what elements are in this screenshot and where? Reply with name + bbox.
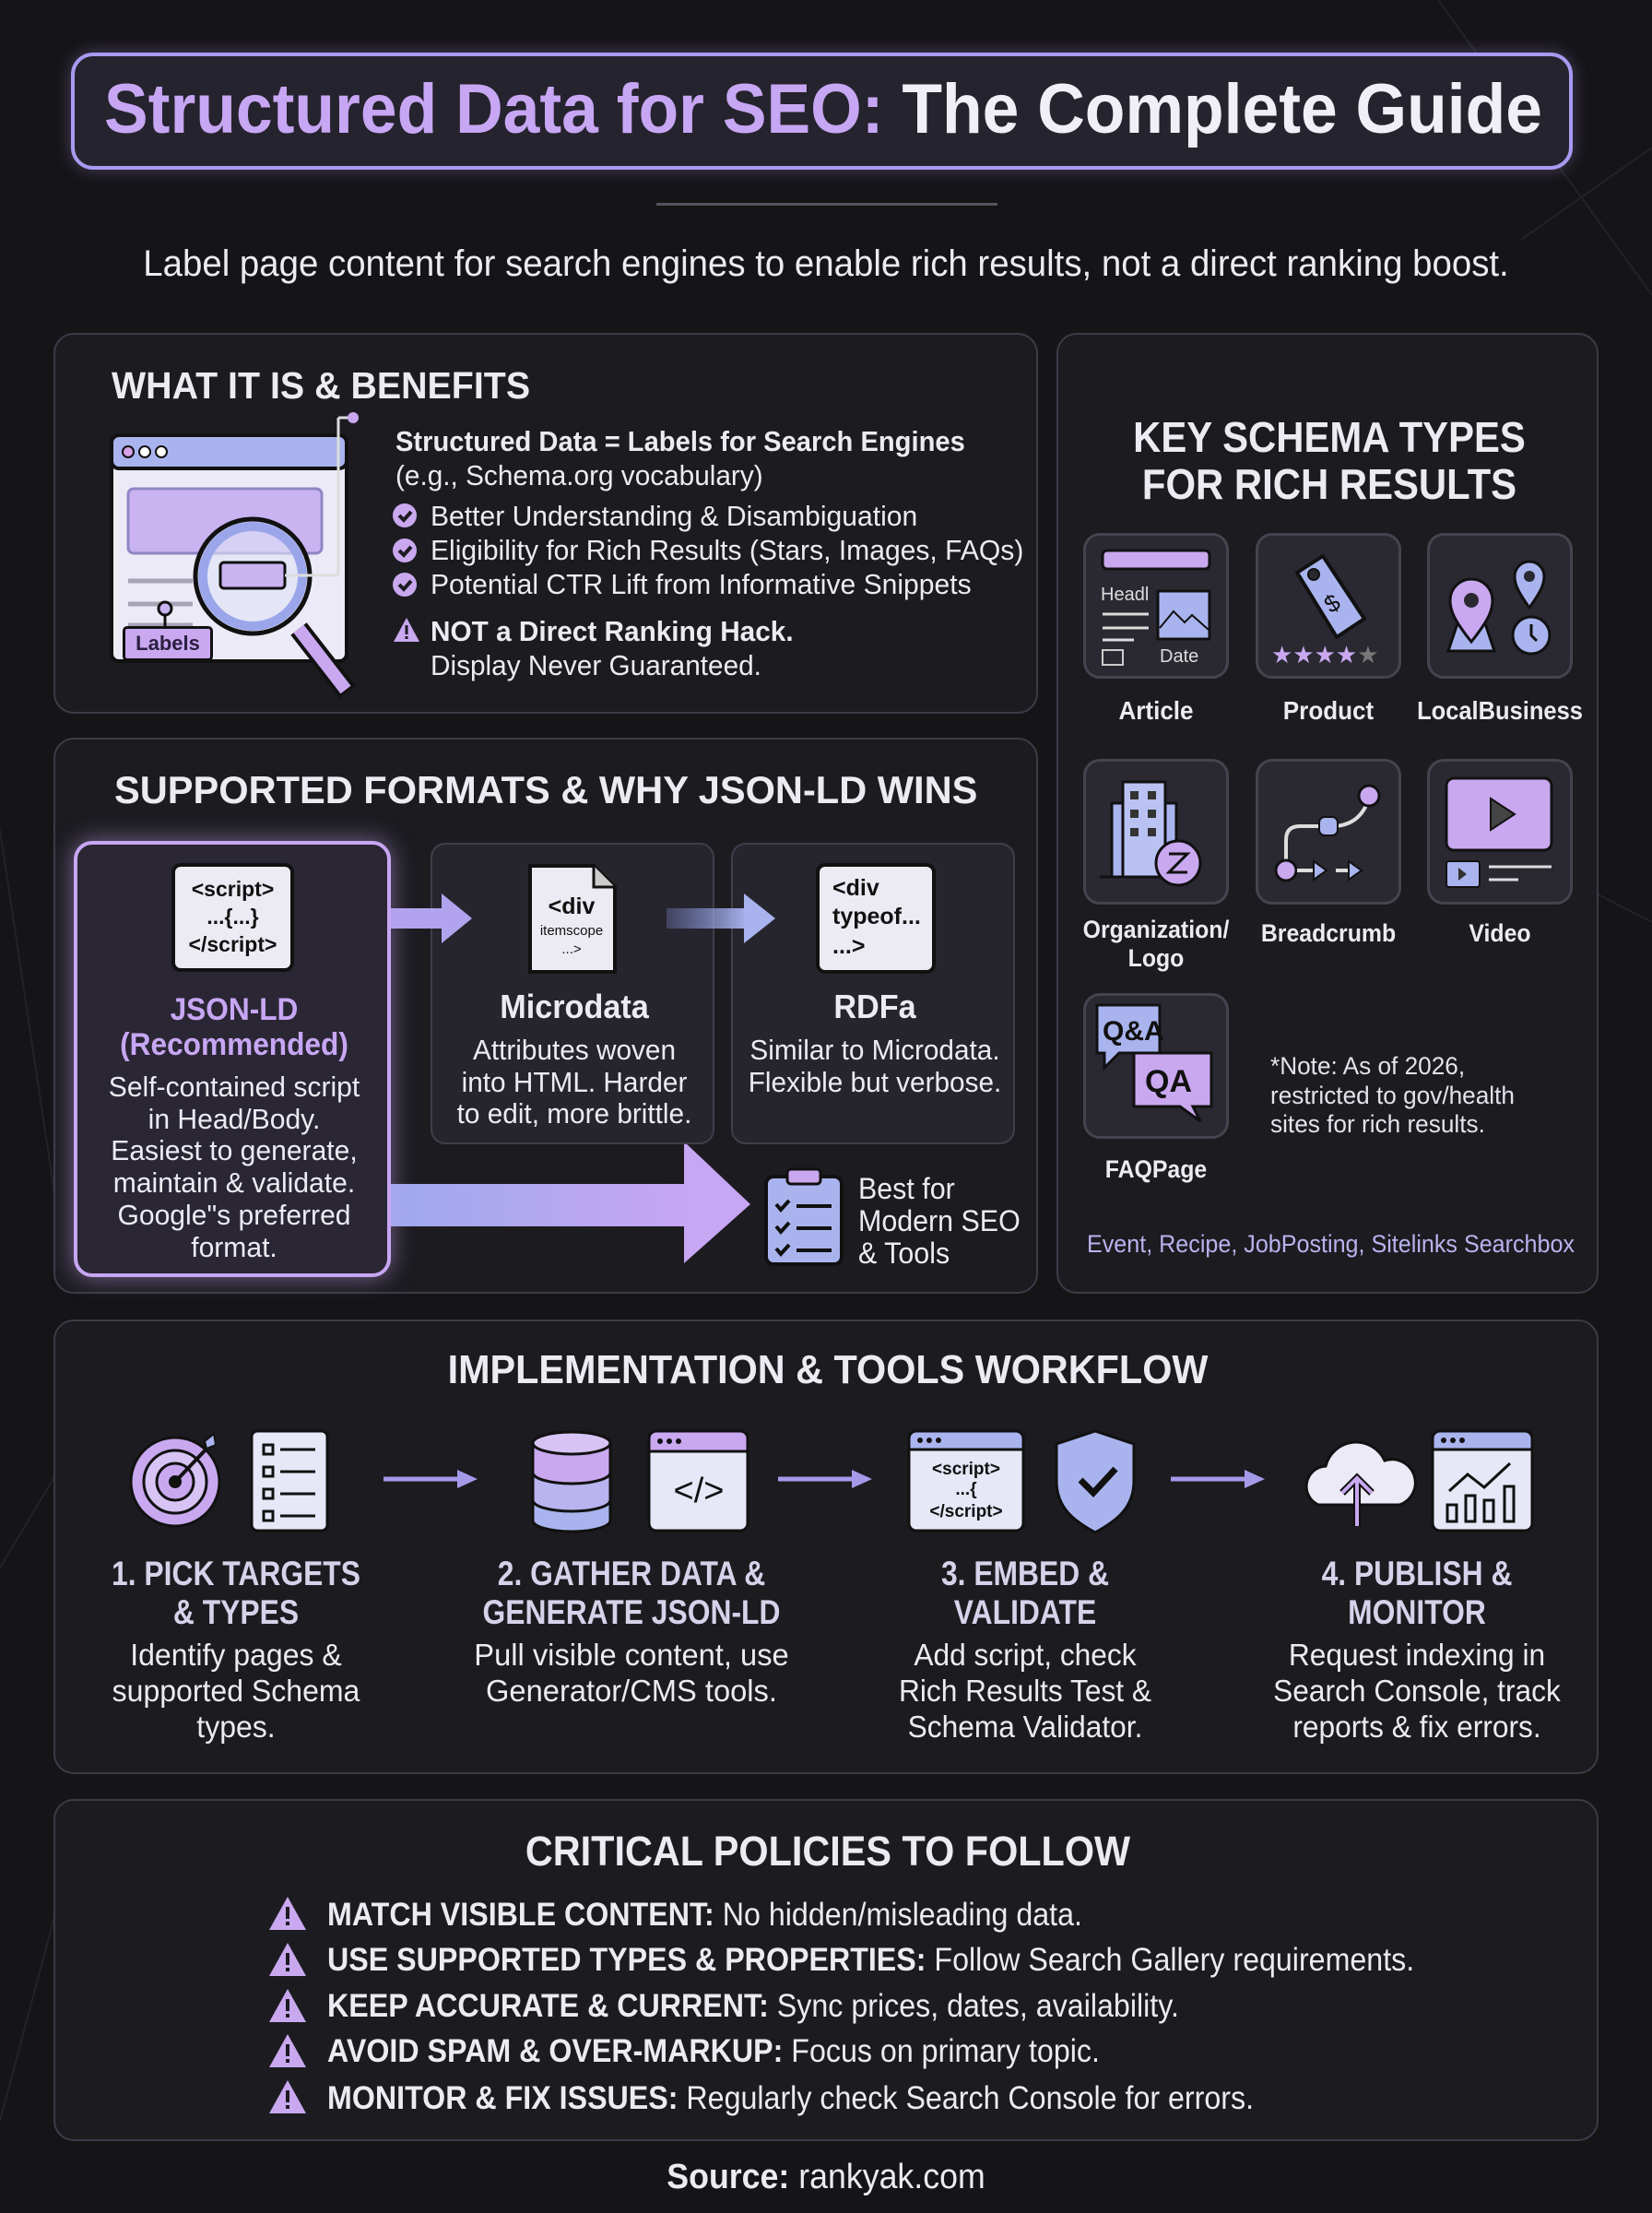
panel: key schema types bbox=[1056, 333, 1599, 1294]
tile: faqpage: Q&A bbox=[1103, 1016, 1164, 1047]
best for modern seo text: & Tools bbox=[858, 1237, 950, 1270]
step 1 text bbox=[112, 1555, 360, 1631]
title text: Structured Data for SEO: The Complete Guide bbox=[104, 70, 1542, 148]
icon: script doc bbox=[171, 863, 294, 972]
panel: implementation workflow: reports & fix errors. bbox=[1292, 1710, 1541, 1744]
card: rdfa: RDFa bbox=[833, 988, 916, 1025]
card: json-ld: Google"s preferred bbox=[117, 1199, 351, 1231]
icon: rdfa doc: <div bbox=[832, 875, 879, 901]
arrow 1 bbox=[384, 1470, 478, 1488]
card: json-ld: JSON-LD bbox=[171, 992, 298, 1027]
benefits list: Eligibility for Rich Results (Stars, Images, FAQs) bbox=[431, 534, 1023, 566]
panel: implementation workflow: Generator/CMS tools. bbox=[486, 1674, 777, 1708]
labels tag: Labels bbox=[136, 632, 200, 655]
card: rdfa: Flexible but verbose. bbox=[749, 1066, 1001, 1098]
step 2 text bbox=[483, 1555, 780, 1631]
tile: product: $ bbox=[1319, 587, 1346, 619]
panel: what it is & benefits bbox=[53, 333, 1038, 714]
card: rdfa: Similar to Microdata. bbox=[749, 1034, 1000, 1066]
tile: local business bbox=[1427, 533, 1573, 679]
step 2 icons: database & code: </> bbox=[674, 1472, 724, 1510]
icon: microdata doc bbox=[528, 864, 617, 974]
note bbox=[1270, 1052, 1515, 1138]
label: organization/logo: Logo bbox=[1128, 944, 1184, 972]
icon: script doc: <script> bbox=[192, 877, 274, 901]
step 4 text: 4. PUBLISH & bbox=[1322, 1555, 1512, 1592]
step 3 text: VALIDATE bbox=[954, 1593, 1096, 1631]
policy list: AVOID SPAM & OVER-MARKUP: Focus on primary topic. bbox=[327, 2033, 1100, 2069]
heading: KEY SCHEMA TYPES bbox=[1133, 413, 1526, 461]
icon: clipboard bbox=[764, 1167, 844, 1266]
step 3 icons: script & shield: <script> bbox=[932, 1460, 1000, 1479]
step 2 text: GENERATE JSON-LD bbox=[483, 1593, 780, 1631]
definition text: Structured Data = Labels for Search Engines bbox=[395, 425, 965, 457]
step 3 text: 3. EMBED & bbox=[941, 1555, 1109, 1592]
labels tag bbox=[123, 626, 213, 661]
icon: rdfa doc: typeof... bbox=[832, 904, 921, 929]
label: organization/logo bbox=[1083, 916, 1230, 972]
label: localbusiness: LocalBusiness bbox=[1417, 696, 1583, 725]
card: json-ld: format. bbox=[191, 1231, 277, 1263]
step 3 text bbox=[941, 1555, 1109, 1631]
arrow 2 bbox=[778, 1470, 872, 1488]
panel: implementation workflow: types. bbox=[196, 1710, 276, 1744]
panel: critical policies bbox=[53, 1799, 1599, 2141]
panel: implementation workflow: Add script, check bbox=[914, 1638, 1137, 1672]
tile: product bbox=[1256, 533, 1401, 679]
card: json-ld: Self-contained script bbox=[109, 1071, 360, 1103]
heading: FOR RICH RESULTS bbox=[1142, 460, 1516, 508]
icon: microdata doc: ...> bbox=[561, 941, 582, 957]
step 2 icons: database & code bbox=[531, 1429, 749, 1533]
step 4 text bbox=[1322, 1555, 1512, 1631]
panel: implementation workflow: Rich Results Test & bbox=[899, 1674, 1151, 1708]
note: restricted to gov/health bbox=[1270, 1082, 1515, 1109]
panel: implementation workflow: supported Schema bbox=[112, 1674, 360, 1708]
other types: Event, Recipe, JobPosting, Sitelinks Searchbox bbox=[1087, 1230, 1575, 1258]
note: *Note: As of 2026, bbox=[1270, 1052, 1465, 1080]
panel: implementation workflow: Search Console, track bbox=[1273, 1674, 1561, 1708]
policy list: MONITOR & FIX ISSUES: Regularly check Search Console for errors. bbox=[327, 2080, 1254, 2116]
panel: implementation workflow bbox=[53, 1320, 1599, 1774]
step 3 icons: script & shield: </script> bbox=[929, 1502, 1003, 1521]
step 1 icons: target & list bbox=[129, 1429, 328, 1533]
tile: organization bbox=[1083, 759, 1229, 905]
arrow: microdata to rdfa bbox=[667, 893, 775, 943]
label: product: Product bbox=[1283, 696, 1374, 725]
card: microdata: into HTML. Harder bbox=[462, 1066, 687, 1098]
card: json-ld: maintain & validate. bbox=[113, 1166, 355, 1199]
panel: implementation workflow: Identify pages & bbox=[130, 1638, 342, 1672]
heading: CRITICAL POLICIES TO FOLLOW bbox=[525, 1828, 1130, 1875]
tile: article: Headl bbox=[1101, 585, 1149, 605]
warning: not a ranking hack: NOT a Direct Ranking Hack. bbox=[431, 615, 794, 647]
label: organization/logo: Organization/ bbox=[1083, 916, 1229, 943]
benefits list: Potential CTR Lift from Informative Snippets bbox=[431, 568, 972, 600]
best for modern seo text: Best for bbox=[858, 1172, 955, 1205]
note: sites for rich results. bbox=[1270, 1110, 1485, 1138]
divider bbox=[656, 203, 997, 206]
label: breadcrumb: Breadcrumb bbox=[1261, 919, 1396, 947]
card: rdfa bbox=[731, 843, 1015, 1144]
label: article: Article bbox=[1118, 696, 1194, 725]
heading: IMPLEMENTATION & TOOLS WORKFLOW bbox=[448, 1347, 1208, 1392]
card: json-ld: Easiest to generate, bbox=[111, 1134, 358, 1166]
policy list: KEEP ACCURATE & CURRENT: Sync prices, dates, availability. bbox=[327, 1988, 1179, 2024]
benefits list: Better Understanding & Disambiguation bbox=[431, 500, 917, 532]
card: microdata: Microdata bbox=[500, 988, 649, 1025]
best for modern seo text: Modern SEO bbox=[858, 1204, 1021, 1237]
best for modern seo text bbox=[858, 1172, 1021, 1270]
warning: not a ranking hack bbox=[394, 615, 794, 681]
card: json-ld: in Head/Body. bbox=[148, 1103, 320, 1135]
panel: implementation workflow: Pull visible content, use bbox=[474, 1638, 789, 1672]
source: Source: rankyak.com bbox=[667, 2158, 985, 2196]
label: video: Video bbox=[1469, 919, 1531, 947]
tile: faqpage: QA bbox=[1145, 1064, 1192, 1099]
subtitle: Label page content for search engines to enable rich results, not a direct ranking boost. bbox=[143, 243, 1509, 284]
step 3 icons: script & shield: ...{ bbox=[955, 1480, 977, 1499]
heading bbox=[1133, 413, 1526, 508]
icon: rdfa doc: ...> bbox=[832, 933, 865, 959]
step 4 icons: cloud & chart bbox=[1305, 1429, 1534, 1533]
icon: script doc: ...{...} bbox=[206, 905, 259, 929]
step 4 text: MONITOR bbox=[1348, 1593, 1486, 1631]
tile: product: ★★★★★ bbox=[1271, 642, 1379, 669]
card: json-ld bbox=[74, 841, 391, 1277]
policy list bbox=[269, 1897, 1414, 2116]
panel: supported formats bbox=[53, 738, 1038, 1294]
tile: article bbox=[1083, 533, 1229, 679]
icon: microdata doc: itemscope bbox=[540, 923, 603, 939]
policy list: MATCH VISIBLE CONTENT: No hidden/misleading data. bbox=[327, 1897, 1082, 1933]
tile: faqpage bbox=[1083, 993, 1229, 1139]
step 3 icons: script & shield bbox=[907, 1429, 1136, 1534]
title box bbox=[71, 53, 1573, 170]
panel: implementation workflow: Request indexing in bbox=[1289, 1638, 1545, 1672]
label: faqpage: FAQPage bbox=[1105, 1155, 1207, 1183]
warning: not a ranking hack: Display Never Guaranteed. bbox=[431, 649, 761, 681]
step 1 text: 1. PICK TARGETS bbox=[112, 1555, 360, 1592]
policy list: USE SUPPORTED TYPES & PROPERTIES: Follow Search Gallery requirements. bbox=[327, 1942, 1414, 1978]
step 1 text: & TYPES bbox=[173, 1593, 299, 1631]
card: microdata: to edit, more brittle. bbox=[457, 1097, 691, 1130]
step 2 text: 2. GATHER DATA & bbox=[498, 1555, 765, 1592]
tile: article: Date bbox=[1160, 646, 1198, 667]
heading: SUPPORTED FORMATS & WHY JSON-LD WINS bbox=[114, 768, 977, 811]
icon: rdfa doc bbox=[816, 863, 936, 974]
tile: video bbox=[1427, 759, 1573, 905]
card: microdata: Attributes woven bbox=[473, 1034, 676, 1066]
arrow: json-ld to microdata bbox=[391, 893, 472, 943]
card: json-ld: (Recommended) bbox=[120, 1027, 348, 1062]
illustration: browser with magnifier bbox=[110, 412, 359, 697]
card: microdata bbox=[431, 843, 714, 1144]
panel: what it is & benefits: (e.g., Schema.org vocabulary) bbox=[395, 459, 763, 491]
tile: breadcrumb bbox=[1256, 759, 1401, 905]
icon: microdata doc: <div bbox=[549, 893, 595, 919]
benefits list bbox=[393, 500, 1023, 600]
heading: WHAT IT IS & BENEFITS bbox=[112, 364, 530, 407]
panel: implementation workflow: Schema Validator. bbox=[908, 1710, 1142, 1744]
icon: script doc: </script> bbox=[189, 932, 277, 956]
big arrow: best for modern seo bbox=[391, 1144, 750, 1263]
arrow 3 bbox=[1171, 1470, 1265, 1488]
